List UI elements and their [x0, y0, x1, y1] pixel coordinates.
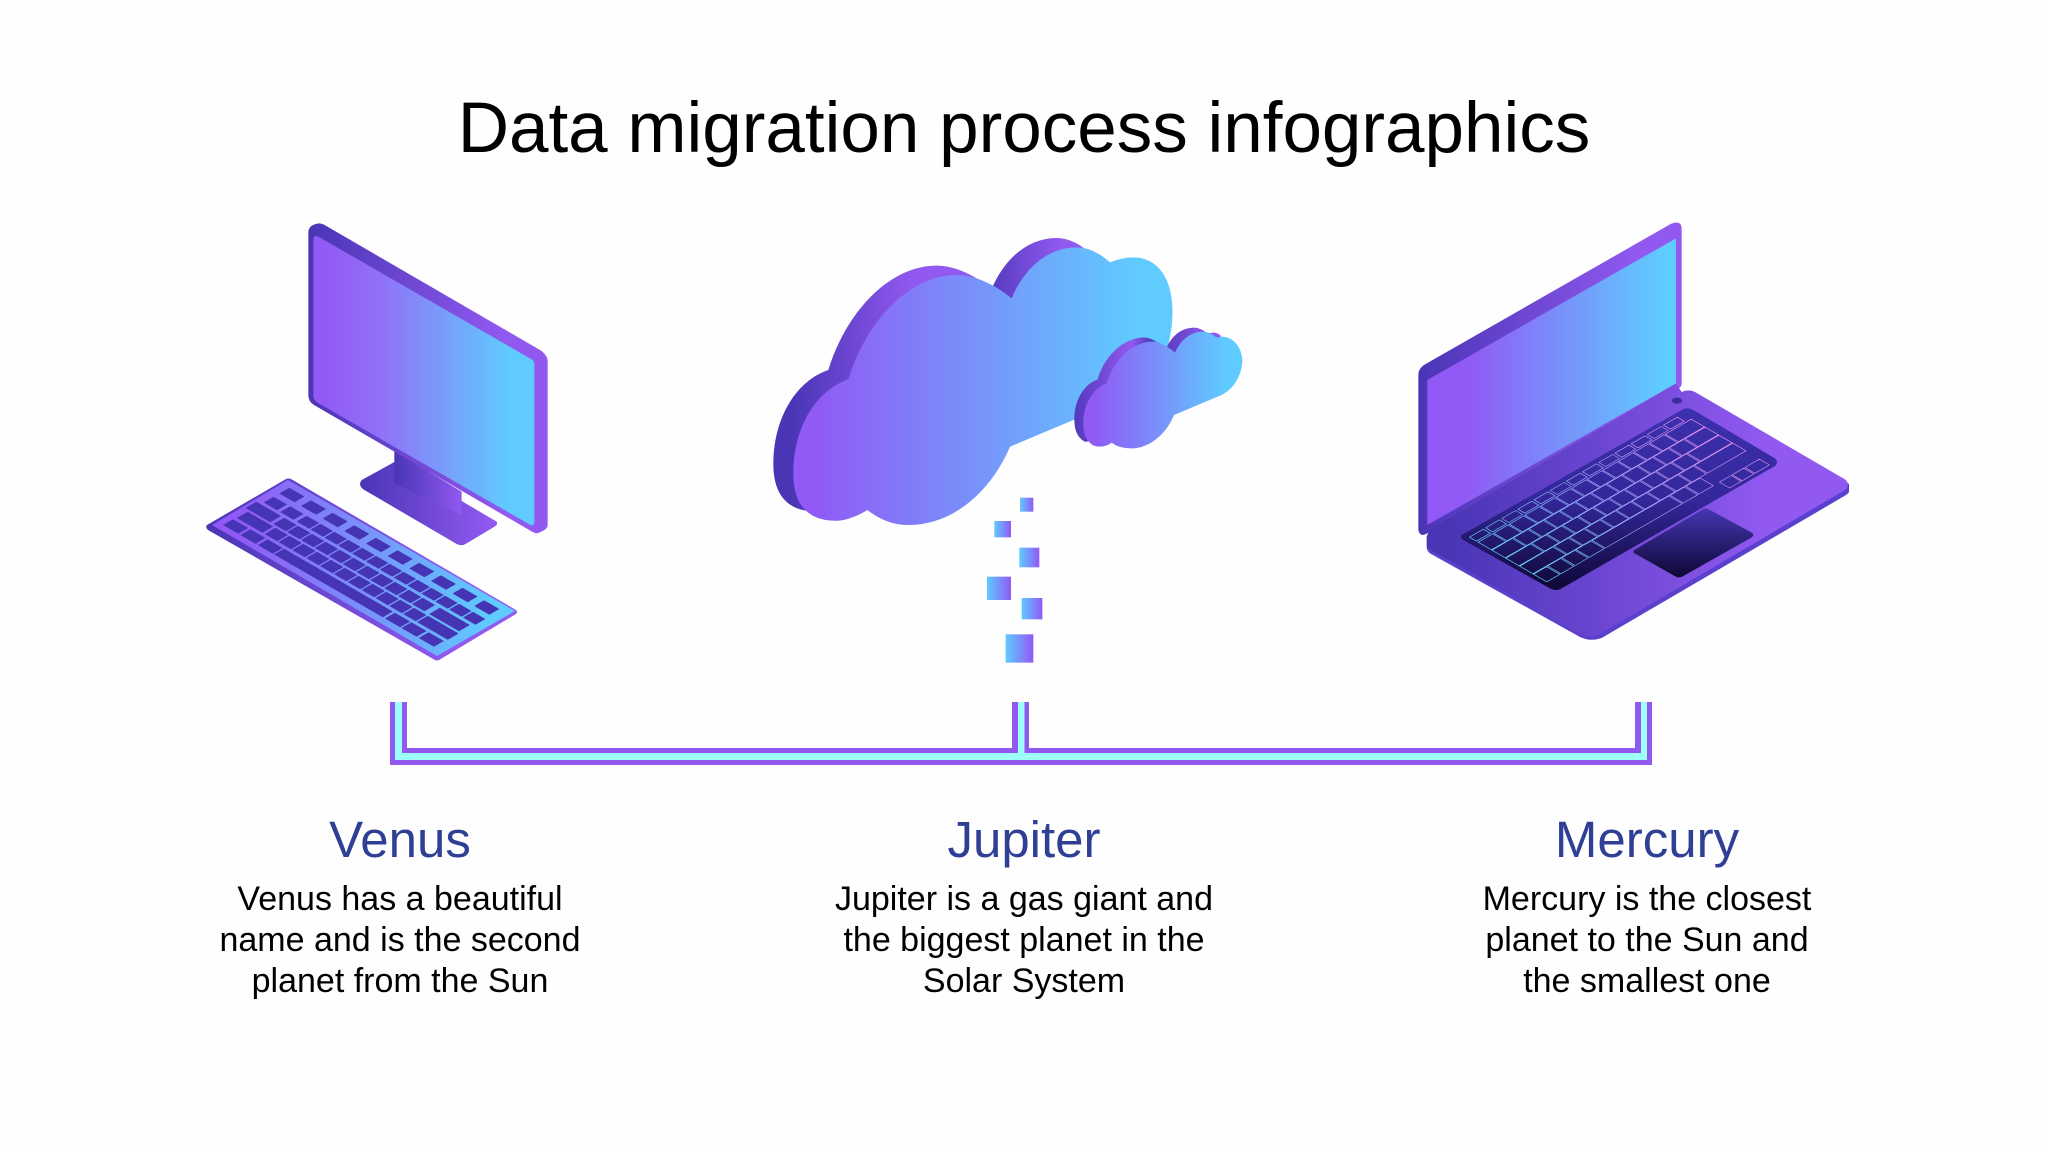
column: Venus — [219, 811, 581, 1000]
laptop lid — [1418, 223, 1682, 535]
icon: laptop — [1418, 223, 1849, 640]
text: Jupiter description: Solar System — [923, 962, 1125, 1000]
connector lines — [390, 702, 1652, 765]
data bits falling from cloud — [987, 498, 1042, 663]
column: Mercury — [1483, 811, 1812, 1000]
laptop base top — [1427, 383, 1848, 636]
text: Mercury description: planet to the Sun and — [1485, 921, 1809, 959]
laptop keyboard panel — [1461, 408, 1777, 590]
title: Data migration process infographics — [458, 89, 1590, 168]
heading: Jupiter: Jupiter — [947, 811, 1101, 868]
heading: Mercury: Mercury — [1555, 811, 1740, 868]
icon: desktop monitor and keyboard — [206, 223, 548, 661]
text: Venus description: name and is the second — [219, 921, 581, 959]
keyboard body — [206, 478, 517, 660]
text: Jupiter description: the biggest planet in the — [843, 921, 1205, 959]
monitor stand base — [360, 462, 497, 545]
laptop keys — [1469, 414, 1770, 588]
text: Venus description: Venus has a beautiful — [237, 880, 563, 918]
text: Venus description: planet from the Sun — [252, 962, 548, 1000]
monitor — [308, 223, 548, 545]
column: Jupiter — [835, 811, 1213, 1000]
icon: cloud — [773, 238, 1242, 663]
text: Mercury description: Mercury is the closest — [1483, 880, 1812, 918]
small cloud face — [1083, 332, 1242, 448]
text: Jupiter description: Jupiter is a gas giant and — [835, 880, 1213, 918]
camera dot — [1672, 398, 1682, 404]
monitor stand neck — [394, 451, 462, 515]
monitor body — [308, 223, 548, 533]
text: Mercury description: the smallest one — [1523, 962, 1771, 1000]
monitor screen — [313, 236, 534, 525]
keyboard face — [212, 480, 515, 656]
connector outer purple — [390, 702, 1652, 765]
keyboard keys — [221, 486, 500, 647]
heading: Venus: Venus — [329, 811, 471, 868]
laptop base rim — [1427, 393, 1849, 640]
laptop trackpad — [1633, 509, 1753, 577]
large cloud extrusion — [773, 238, 1107, 511]
small cloud extrusion — [1074, 328, 1221, 442]
laptop screen — [1427, 238, 1676, 525]
connector inner cyan — [395, 702, 1647, 760]
large cloud face — [793, 247, 1172, 525]
